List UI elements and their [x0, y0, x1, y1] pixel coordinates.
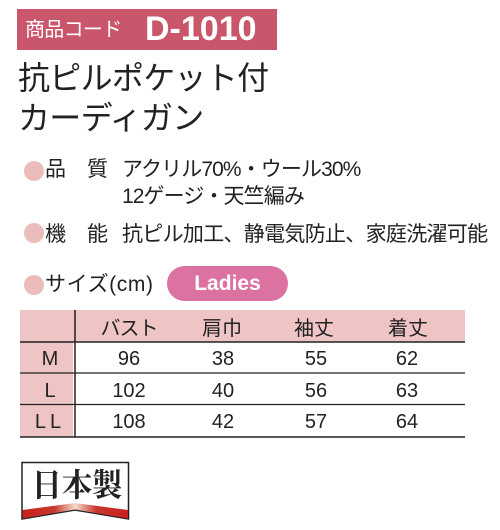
column headers	[100, 317, 428, 340]
badge outline	[22, 462, 128, 519]
size table	[20, 310, 465, 438]
Ladies badge: Ladies	[194, 272, 261, 295]
spec: function	[24, 223, 488, 246]
row L: L	[44, 380, 56, 402]
row L: 56	[305, 380, 327, 402]
ribbon	[22, 503, 128, 518]
row LL: LL	[35, 411, 65, 433]
column headers: 袖丈	[294, 317, 334, 340]
row M: 38	[212, 348, 234, 370]
product code banner	[17, 9, 277, 50]
column headers: バスト	[100, 318, 158, 340]
spec: quality	[24, 158, 361, 208]
function label: 機 能	[45, 223, 108, 246]
row M	[42, 348, 418, 370]
column headers: 肩巾	[202, 317, 242, 340]
bullet: function	[24, 223, 44, 243]
product code label: 商品コード	[25, 19, 122, 41]
row L: 63	[396, 380, 418, 402]
row LL: 57	[305, 411, 327, 433]
table rules	[20, 310, 465, 437]
row LL: 42	[212, 411, 234, 433]
row L: 102	[112, 380, 146, 402]
quality label: 品 質	[45, 158, 108, 181]
row M: 96	[118, 348, 140, 370]
quality text: 12ゲージ・天竺編み	[122, 185, 304, 208]
product title	[18, 60, 268, 136]
bullet: size	[24, 275, 44, 295]
product code number: D-1010	[145, 10, 257, 48]
Ladies badge	[167, 266, 288, 301]
quality text: アクリル70%・ウール30%	[122, 158, 360, 181]
row LL	[35, 411, 418, 433]
table header shading	[20, 310, 465, 437]
row L	[44, 380, 418, 402]
quality text	[122, 158, 361, 208]
bullet: quality	[24, 161, 44, 181]
row LL: 64	[396, 411, 418, 433]
size heading	[24, 266, 288, 301]
function text: 抗ピル加工、静電気防止、家庭洗濯可能	[122, 223, 487, 246]
row LL: 108	[112, 411, 146, 433]
row M: 55	[305, 348, 327, 370]
row L: 40	[212, 380, 234, 402]
product title: 抗ピルポケット付	[18, 60, 268, 96]
badge text: 日本製	[32, 460, 122, 506]
column headers: 着丈	[388, 317, 428, 340]
row M: M	[42, 348, 58, 370]
size label: サイズ(cm)	[45, 273, 154, 296]
made in Japan badge	[21, 460, 130, 520]
row M: 62	[396, 348, 418, 370]
product title: カーディガン	[18, 100, 204, 136]
